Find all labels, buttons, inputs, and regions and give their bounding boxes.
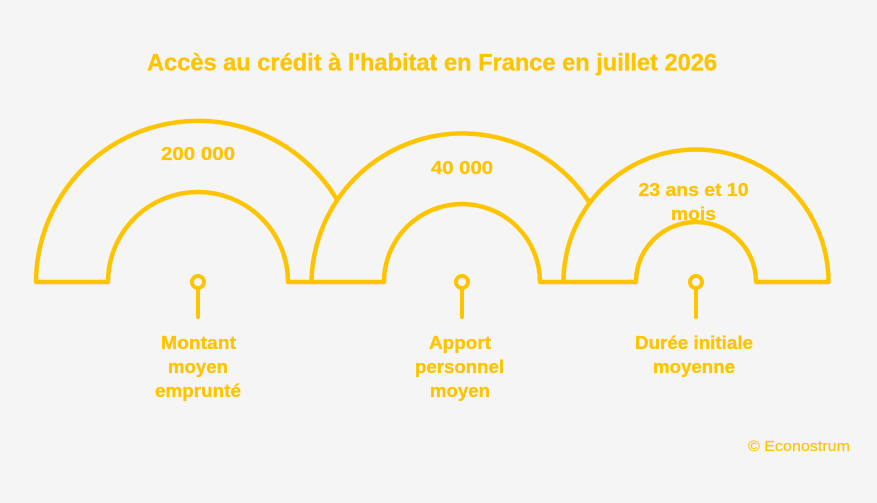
arch 3: durée initiale moyenne <box>564 150 828 282</box>
label: apport personnel moyen: moyen <box>430 381 490 401</box>
label: apport personnel moyen: personnel <box>415 357 504 377</box>
icon: pin 3 <box>690 276 702 317</box>
label: montant moyen emprunté: moyen <box>168 357 228 377</box>
title: Accès au crédit à l'habitat en France en juillet 2026 <box>147 50 717 76</box>
label: montant moyen emprunté: Montant <box>161 333 236 353</box>
arch 2: apport personnel moyen <box>312 133 589 282</box>
label: montant moyen emprunté <box>155 333 241 401</box>
icon: pin 1 <box>192 276 204 317</box>
value: 40 000: 40 000 <box>431 158 493 178</box>
arch 1: montant moyen emprunté <box>36 121 336 282</box>
value: 23 ans et 10 mois: mois <box>671 204 716 224</box>
icon: pin 2 <box>456 276 468 317</box>
label: montant moyen emprunté: emprunté <box>155 381 241 401</box>
source credit: © Econostrum <box>748 438 850 455</box>
label: apport personnel moyen: Apport <box>429 333 491 353</box>
value: 23 ans et 10 mois <box>638 180 748 224</box>
label: apport personnel moyen <box>415 333 504 401</box>
label: durée initiale moyenne <box>635 333 753 377</box>
label: durée initiale moyenne: moyenne <box>653 357 735 377</box>
value: 23 ans et 10 mois: 23 ans et 10 <box>638 180 748 200</box>
arch chart: three overlapping half-rings <box>36 121 828 282</box>
label: durée initiale moyenne: Durée initiale <box>635 333 753 353</box>
value: 200 000: 200 000 <box>161 144 235 164</box>
